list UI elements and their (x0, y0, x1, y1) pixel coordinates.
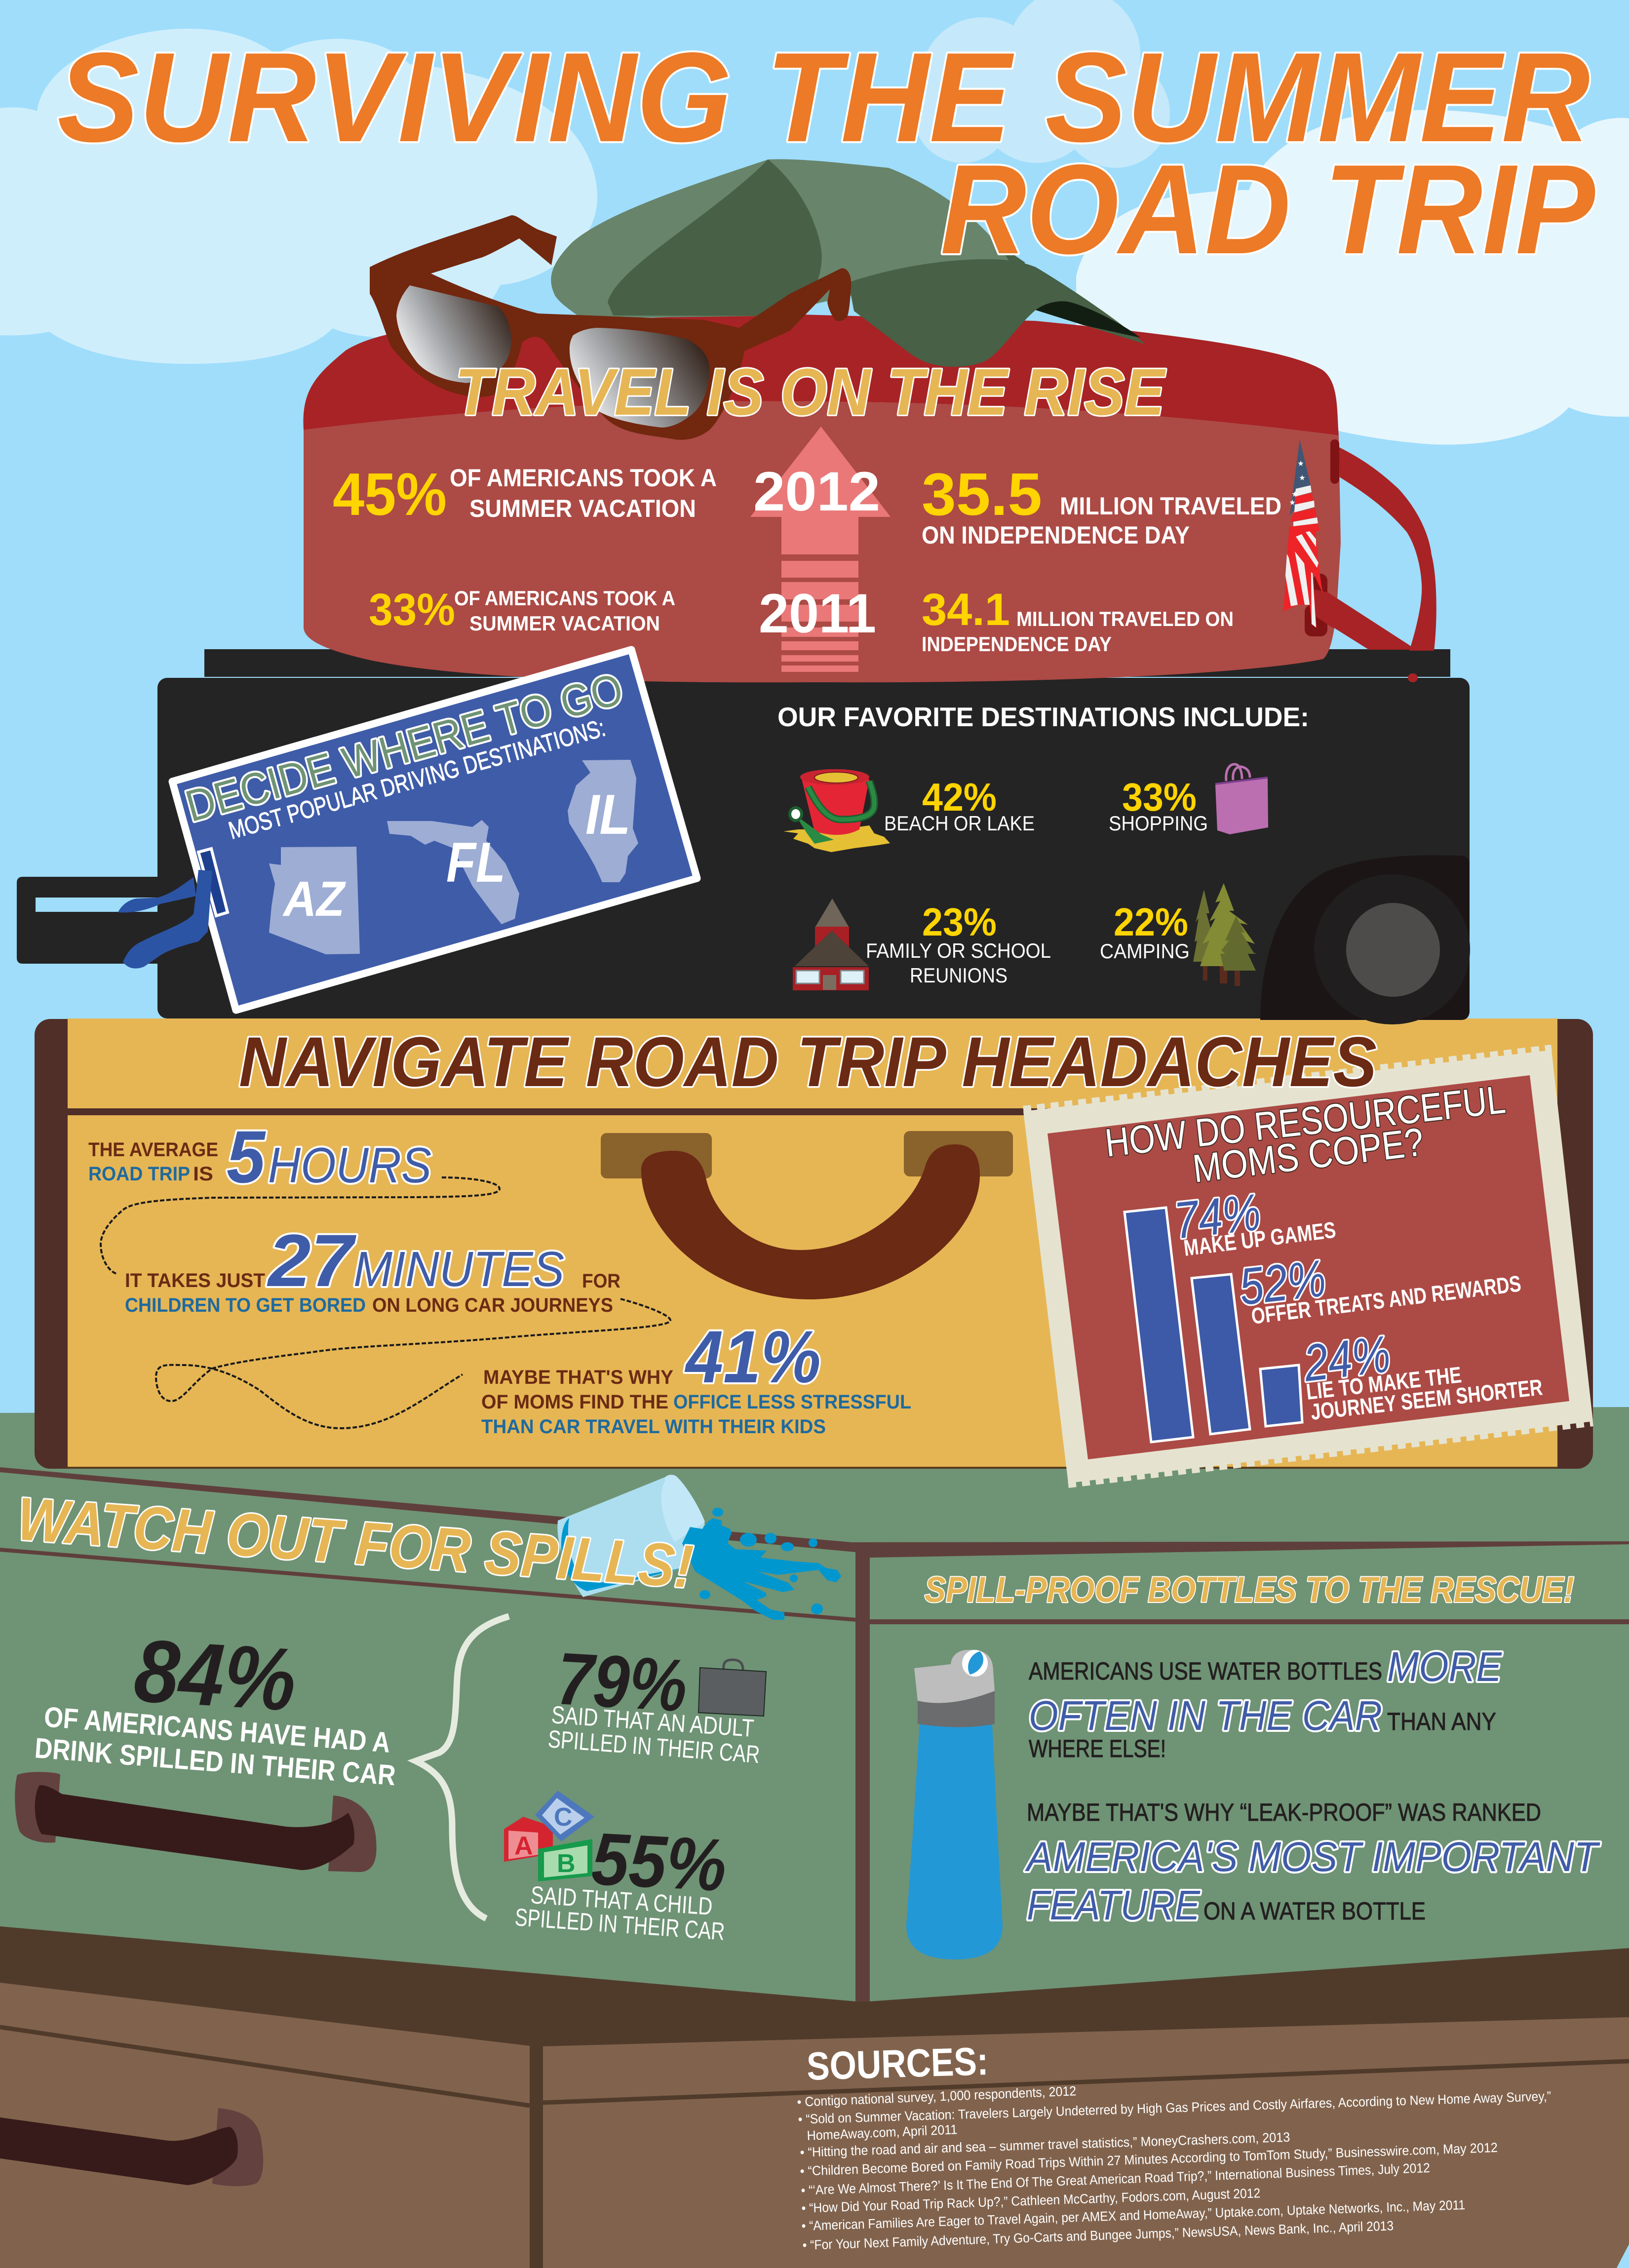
map: Illinois (568, 760, 638, 882)
text block: leak proof (1024, 1799, 1600, 1928)
year labels (753, 461, 880, 644)
stat: 35.5 million: ON INDEPENDENCE DAY (922, 521, 1190, 549)
stat: shopping (1109, 775, 1208, 835)
map: Florida: FL (446, 831, 505, 894)
stat: 35.5 million: 35.5 (922, 461, 1042, 528)
heading: navigate road trip headaches: NAVIGATE ROAD TRIP HEADACHES (239, 1023, 1377, 1101)
panel: spills statistics (34, 1616, 766, 1946)
left tab of black suitcase (17, 877, 163, 964)
sources list (797, 2083, 1551, 2253)
icon: alphabet blocks (504, 1791, 594, 1881)
text block: 27 minutes: FOR (582, 1270, 621, 1292)
panel: sources (797, 2039, 1551, 2253)
text block: 41 percent (481, 1315, 911, 1438)
sources heading: SOURCES: (806, 2039, 989, 2088)
stat: 79 percent: SPILLED IN THEIR CAR (547, 1725, 761, 1768)
stat: family or school reunions: REUNIONS (910, 964, 1008, 987)
stat: camping: CAMPING (1100, 939, 1190, 963)
stat: 33 percent 2011: OF AMERICANS TOOK A (454, 587, 675, 610)
icon: briefcase (698, 1660, 766, 1716)
stat: 55 percent: SPILLED IN THEIR CAR (514, 1903, 726, 1946)
stat: 55 percent: SAID THAT A CHILD (530, 1881, 713, 1920)
sources list: • “Sold on Summer Vacation: Travelers Largely Undeterred by High Gas Prices and Costly Airfares, According to New Home Away Survey,” (798, 2089, 1551, 2127)
text block: water bottles: THAN ANY (1387, 1708, 1496, 1735)
stat: 33 percent 2011: 33% (369, 585, 455, 635)
icon: green suitcase handle (15, 1772, 377, 1872)
bar: 74 percent (1125, 1183, 1337, 1442)
text block: average trip 5 hours: ROAD TRIP (88, 1163, 190, 1185)
sign slot (198, 849, 228, 916)
map: Arizona (269, 847, 360, 954)
brown suitcase seams (0, 2027, 1629, 2268)
stat: 79 percent (547, 1637, 761, 1768)
panel: travel stats (333, 461, 1281, 656)
icon: green hat (551, 159, 1145, 367)
text block: average trip 5 hours: HOURS (268, 1138, 431, 1193)
icon: sunglasses (370, 215, 851, 440)
bar: 74 percent: MAKE UP GAMES (1182, 1217, 1337, 1261)
stat: 34.1 million: MILLION TRAVELED ON (1016, 607, 1234, 630)
text block: 41 percent: THAN CAR TRAVEL WITH THEIR KIDS (481, 1416, 826, 1438)
stat: family or school reunions (866, 900, 1051, 987)
text block: 41 percent: OF MOMS FIND THE (481, 1391, 668, 1413)
bar: 52 percent: OFFER TREATS AND REWARDS (1250, 1270, 1522, 1329)
icon: shopping bag (1215, 764, 1268, 834)
icon: spilled cup (557, 1475, 705, 1597)
stamp heading (1103, 1077, 1508, 1191)
bar: 52 percent (1192, 1250, 1522, 1434)
text block: leak proof: FEATURE (1027, 1882, 1201, 1928)
bar: 74 percent: 74% (1171, 1183, 1263, 1250)
clouds (0, 0, 1629, 445)
text block: 27 minutes: IT TAKES JUST (125, 1270, 265, 1291)
brace (416, 1616, 509, 1918)
icon: beach bucket (783, 769, 890, 852)
stat: family or school reunions: 23% (922, 900, 997, 944)
bar: 24 percent: JOURNEY SEEM SHORTER (1309, 1374, 1544, 1425)
text block: average trip 5 hours: IS (193, 1163, 213, 1185)
stat: 45 percent 2012: SUMMER VACATION (469, 495, 696, 522)
icon: water splash (682, 1508, 841, 1620)
stat: 45 percent 2012 (333, 461, 717, 528)
panel: favorite destinations (777, 702, 1309, 990)
text block: 41 percent: 41% (684, 1315, 821, 1398)
icon: alphabet blocks: C (554, 1803, 573, 1832)
stat: camping (1100, 900, 1190, 963)
panel: black suitcase (157, 649, 1470, 1018)
text block: 27 minutes: 27 (267, 1219, 357, 1302)
text block: 41 percent: OFFICE LESS STRESSFUL (673, 1391, 911, 1413)
text block: average trip 5 hours: THE AVERAGE (88, 1139, 218, 1161)
sources list: • “How Did Your Road Trip Rack Up?,” Cathleen McCarthy, Fodors.com, August 2012 (801, 2186, 1261, 2216)
stat: 34.1 million: INDEPENDENCE DAY (922, 632, 1112, 656)
stat: 45 percent 2012: OF AMERICANS TOOK A (450, 464, 717, 492)
map: Illinois: IL (585, 783, 630, 846)
text block: average trip 5 hours (88, 1115, 431, 1198)
sources list: • “‘Are We Almost There?’ Is It The End Of The Great American Road Trip?,” International Business Times, July 2012 (801, 2160, 1430, 2198)
title: ROAD TRIP (940, 138, 1595, 280)
stat: beach or lake: BEACH OR LAKE (884, 812, 1035, 835)
heading: watch out for spills: WATCH OUT FOR SPILLS! (15, 1485, 695, 1601)
arrow (750, 427, 891, 672)
stat: 34.1 million (922, 585, 1234, 656)
map: Arizona: AZ (282, 871, 347, 927)
stat: 79 percent: 79% (555, 1637, 690, 1727)
sign subheading: MOST POPULAR DRIVING DESTINATIONS: (226, 714, 608, 845)
panel: spill proof text (1024, 1643, 1600, 1928)
brown suitcase body (0, 1983, 1629, 2268)
title (57, 26, 1595, 280)
year labels: 2011 (759, 583, 876, 644)
title: SURVIVING THE SUMMER (57, 26, 1590, 168)
stat: 84 percent: OF AMERICANS HAVE HAD A (43, 1701, 391, 1759)
sources list: • “Children Become Bored on Family Road Trips Within 27 Minutes According to TomTom Study,” Businesswire.com, May 2012 (800, 2140, 1498, 2179)
sky corner bottom right (1617, 2244, 1629, 2268)
stamp heading: MOMS COPE? (1190, 1120, 1426, 1191)
stat: 35.5 million: MILLION TRAVELED (1060, 492, 1281, 520)
bar: 24 percent (1260, 1325, 1544, 1426)
stat: 33 percent 2011: SUMMER VACATION (469, 612, 660, 635)
brown suitcase rim (0, 1926, 1629, 2054)
sources list: • Contigo national survey, 1,000 respondents, 2012 (797, 2083, 1077, 2110)
icon: water bottle (906, 1650, 1003, 1959)
text block: leak proof: ON A WATER BOTTLE (1203, 1897, 1426, 1925)
stat: 33 percent 2011 (369, 585, 675, 635)
text block: 27 minutes: CHILDREN TO GET BORED (125, 1294, 366, 1316)
text block: water bottles (1029, 1643, 1502, 1762)
sources list: HomeAway.com, April 2011 (807, 2122, 958, 2143)
text block: leak proof: MAYBE THAT'S WHY “LEAK-PROOF” WAS RANKED (1027, 1799, 1541, 1826)
text block: water bottles: OFTEN IN THE CAR (1029, 1692, 1382, 1739)
text block: 41 percent: MAYBE THAT'S WHY (483, 1367, 673, 1388)
bar: 24 percent: 24% (1300, 1325, 1393, 1393)
bar: 52 percent: 52% (1237, 1250, 1328, 1316)
stat: 79 percent: SAID THAT AN ADULT (550, 1701, 755, 1742)
bar: 24 percent: LIE TO MAKE THE (1305, 1362, 1463, 1405)
stat: 55 percent (514, 1817, 729, 1946)
stat: beach or lake: 42% (922, 775, 997, 819)
stat: 34.1 million: 34.1 (922, 585, 1010, 635)
icon: wheel (1260, 855, 1470, 1024)
panel: red hat box (303, 313, 1372, 682)
heading: travel is on the rise: TRAVEL IS ON THE RISE (455, 355, 1166, 429)
sources list: • “Hitting the road and air and sea – summer travel statistics,” MoneyCrashers.com, 2013 (800, 2130, 1290, 2160)
destinations heading: OUR FAVORITE DESTINATIONS INCLUDE: (777, 702, 1309, 732)
text block: water bottles: WHERE ELSE! (1029, 1735, 1166, 1762)
stat: shopping: 33% (1122, 775, 1197, 819)
stat: beach or lake (884, 775, 1035, 835)
icon: schoolhouse (793, 899, 869, 990)
stat: 84 percent: 84% (132, 1621, 299, 1730)
text block: water bottles: AMERICANS USE WATER BOTTLES (1029, 1657, 1382, 1685)
icon: alphabet blocks: B (557, 1849, 576, 1878)
text block: average trip 5 hours: 5 (227, 1115, 266, 1198)
stat: 84 percent: DRINK SPILLED IN THEIR CAR (34, 1732, 397, 1792)
route dashed line (101, 1177, 670, 1428)
text block: water bottles: MORE (1387, 1643, 1502, 1690)
text block: 27 minutes: MINUTES (353, 1242, 564, 1297)
panel: yellow suitcase (35, 1018, 1593, 1469)
stat: camping: 22% (1114, 900, 1188, 944)
green suitcase seams (0, 1467, 1629, 2004)
stamp heading: HOW DO RESOURCEFUL (1103, 1077, 1508, 1165)
icon: yellow suitcase handle (601, 1131, 1013, 1299)
text block: leak proof: AMERICA'S MOST IMPORTANT (1024, 1834, 1600, 1880)
stat: 35.5 million (922, 461, 1281, 549)
sources list: • “For Your Next Family Adventure, Try Go-Carts and Bungee Jumps,” NewsUSA, News Bank, Inc., April 2013 (802, 2218, 1394, 2253)
text block: 27 minutes (125, 1219, 621, 1316)
stat: 45 percent 2012: 45% (333, 461, 447, 528)
icon: brown suitcase handle (0, 2108, 263, 2186)
map: Florida (387, 820, 519, 924)
stat: 84 percent (34, 1621, 397, 1792)
sources list: • “American Families Are Eager to Travel Again, per AMEX and HomeAway,” Uptake.com, Uptake Networks, Inc., May 2011 (801, 2197, 1466, 2233)
icon: flag (1283, 439, 1323, 627)
icon: right strap of red case (1315, 447, 1436, 682)
icon: pine trees (1193, 883, 1257, 986)
icon: alphabet blocks: A (514, 1832, 533, 1860)
sign heading: DECIDE WHERE TO GO (181, 664, 628, 831)
panel: moms cope stamp (1023, 1048, 1593, 1485)
stat: family or school reunions: FAMILY OR SCHOOL (866, 939, 1051, 962)
text block: 27 minutes: ON LONG CAR JOURNEYS (372, 1294, 613, 1316)
icon: ribbon (118, 870, 212, 969)
year labels: 2012 (753, 461, 880, 522)
green suitcase body (0, 1407, 1629, 2049)
panel: road sign (118, 650, 697, 1010)
stat: shopping: SHOPPING (1109, 812, 1208, 835)
stat: 55 percent: 55% (589, 1817, 729, 1907)
